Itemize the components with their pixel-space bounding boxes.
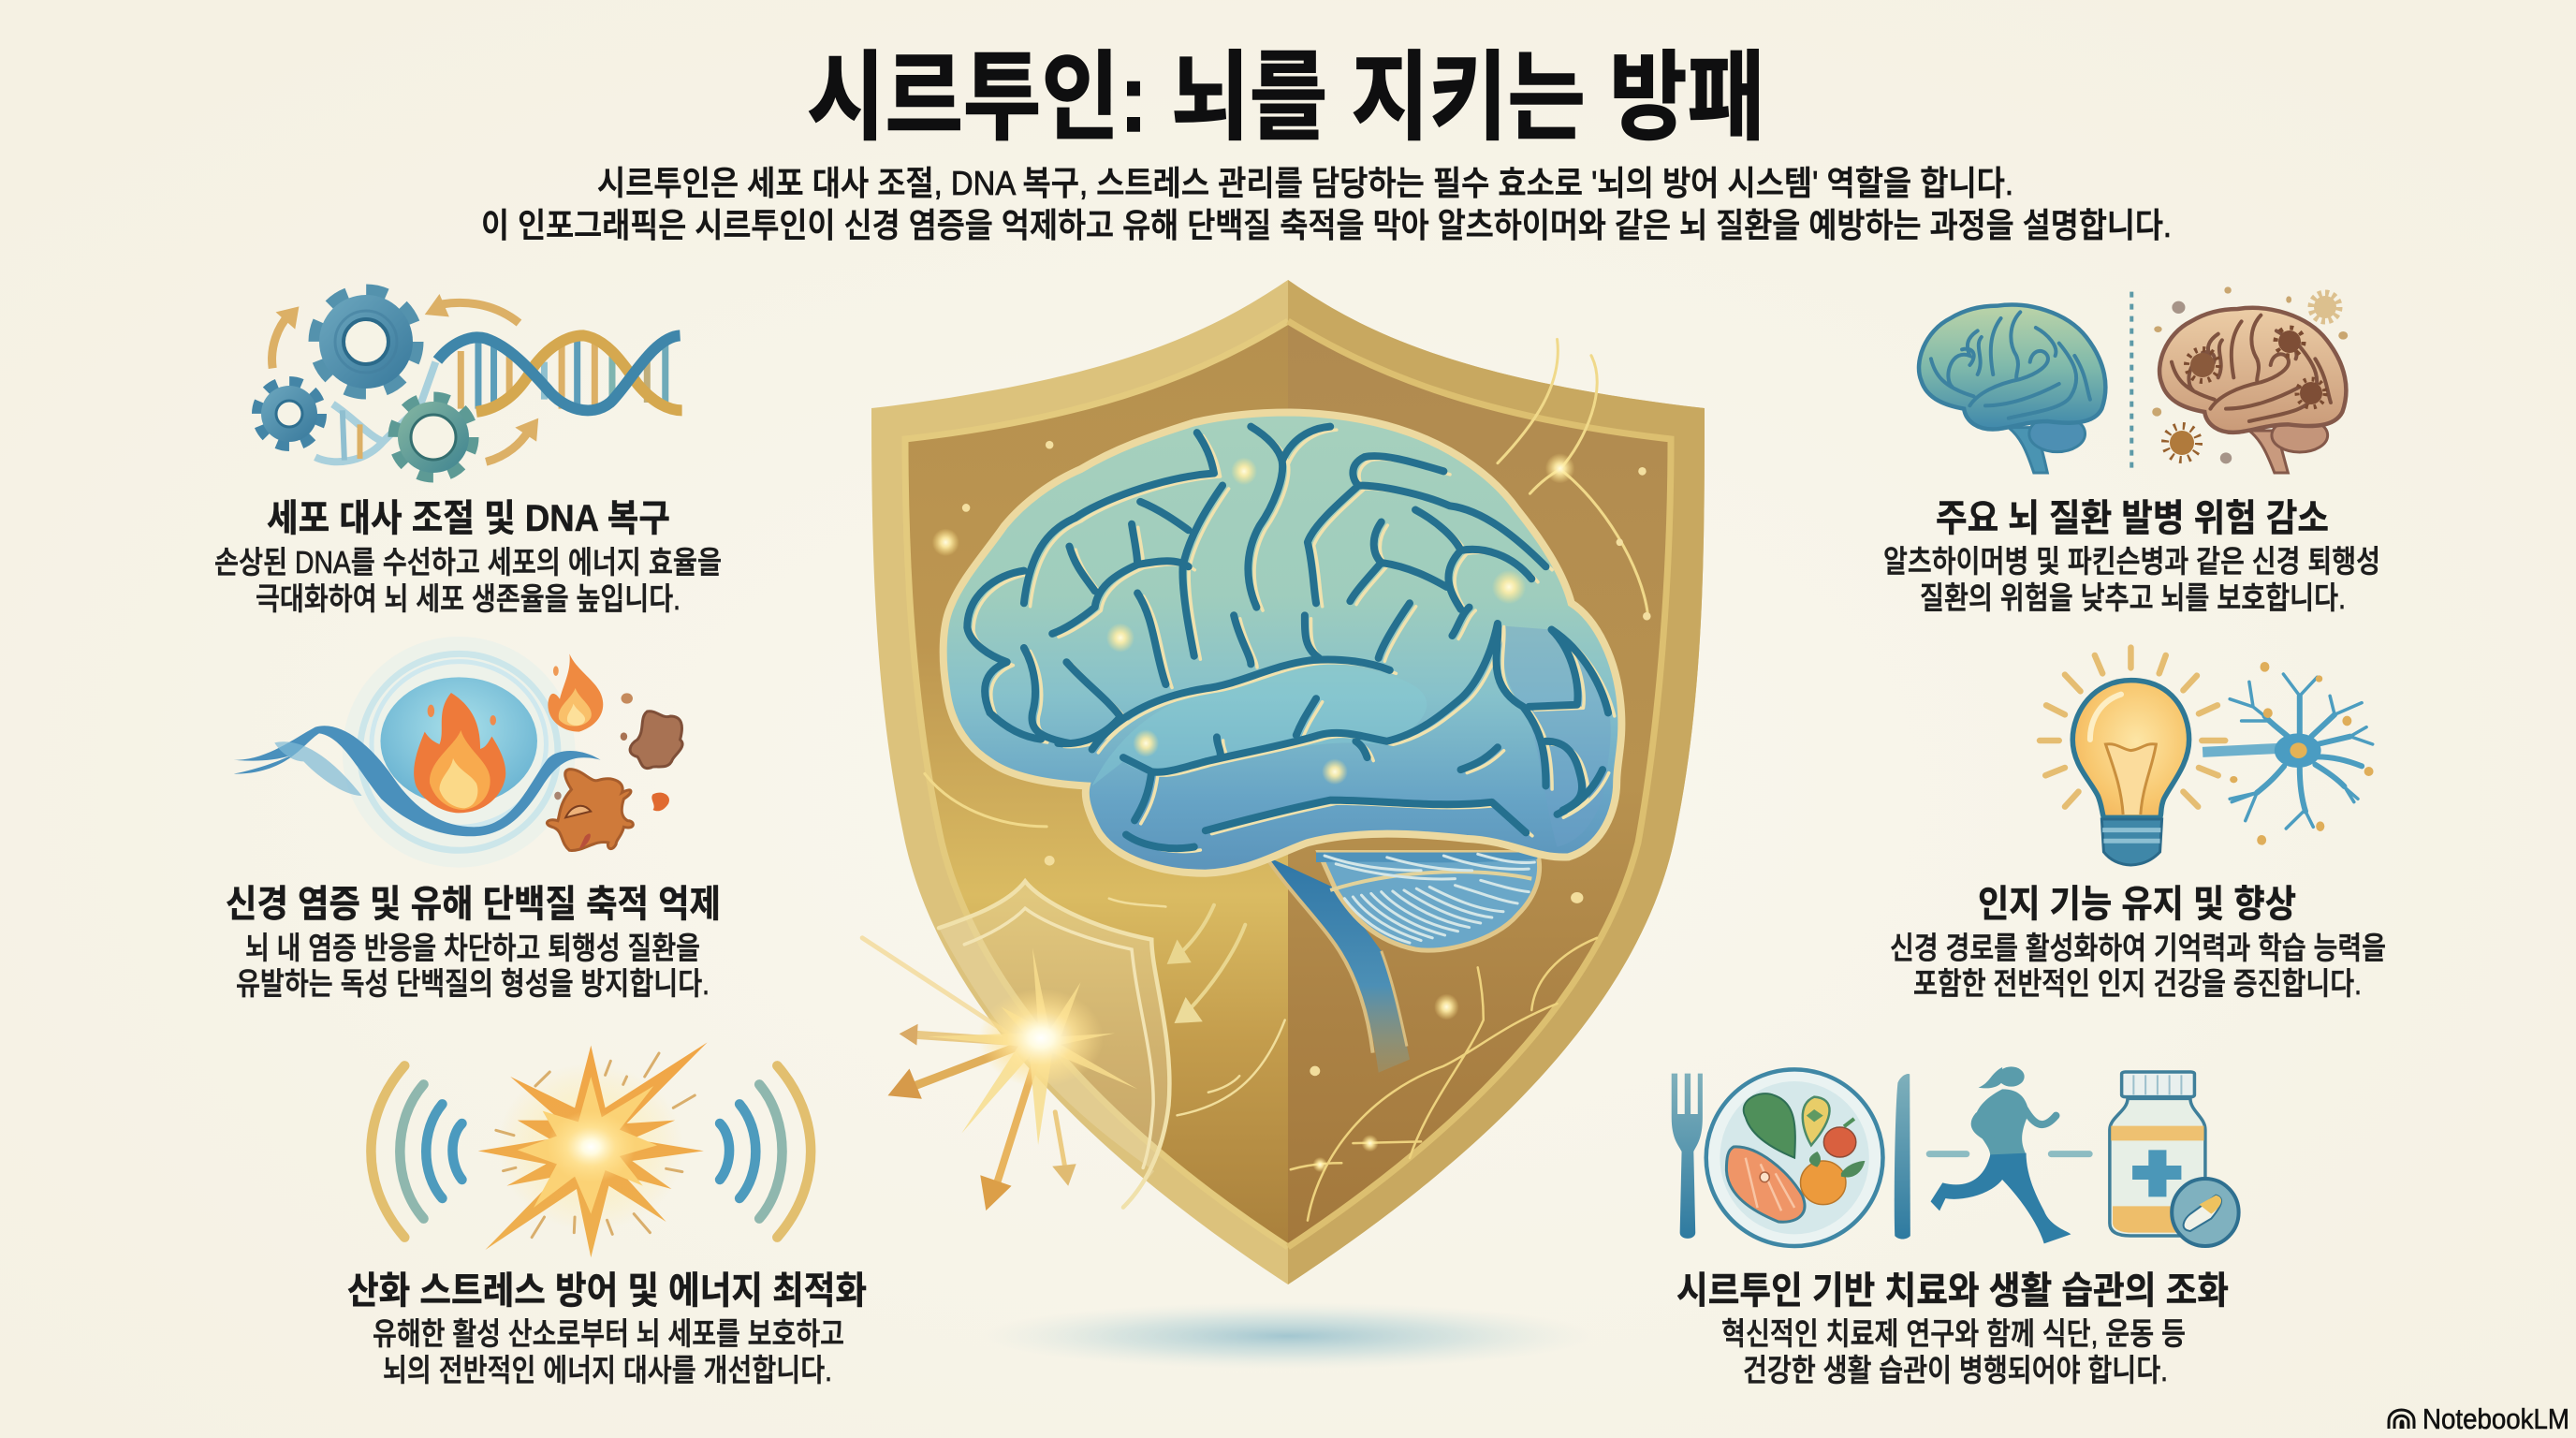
- heading: 주요 뇌 질환 발병 위험 감소: [1936, 498, 2329, 539]
- panel: cell metabolism and DNA repair: [214, 291, 722, 616]
- description: 뇌 내 염증 반응을 차단하고 퇴행성 질환을: [245, 931, 700, 965]
- central shield with brain: [862, 280, 1705, 1284]
- description: [1890, 931, 2386, 1001]
- description: 건강한 생활 습관이 병행되어야 합니다.: [1743, 1353, 2168, 1387]
- panel: reduced brain disease risk: [1883, 286, 2380, 615]
- panel: neuroinflammation and toxic protein suppression: [226, 637, 721, 1001]
- icon: starburst with signal arcs: [371, 1042, 811, 1257]
- heading: 인지 기능 유지 및 향상: [1978, 884, 2296, 925]
- description: 손상된 DNA를 수선하고 세포의 에너지 효율을: [214, 545, 722, 580]
- panel: therapy and lifestyle: [1672, 1066, 2239, 1387]
- description: 유해한 활성 산소로부터 뇌 세포를 보호하고: [373, 1316, 844, 1351]
- intro text: 이 인포그래픽은 시르투인이 신경 염증을 억제하고 유해 단백질 축적을 막아 알츠하이머와 같은 뇌 질환을 예방하는 과정을 설명합니다.: [481, 206, 2172, 244]
- description: 포함한 전반적인 인지 건강을 증진합니다.: [1913, 966, 2362, 1001]
- description: [236, 931, 710, 1001]
- small shield, arrows and impact burst: [862, 856, 1597, 1221]
- heading: 세포 대사 조절 및 DNA 복구: [267, 498, 670, 539]
- description: 혁신적인 치료제 연구와 함께 식단, 운동 등: [1721, 1316, 2186, 1351]
- intro text: [481, 164, 2172, 244]
- description: [1883, 544, 2380, 615]
- description: 신경 경로를 활성화하여 기억력과 학습 능력을: [1890, 931, 2386, 965]
- icon: healthy brain versus diseased brain: [1919, 286, 2348, 475]
- icon: plate, runner and medicine bottle: [1672, 1066, 2239, 1246]
- heading: 신경 염증 및 유해 단백질 축적 억제: [226, 884, 721, 925]
- panel: cognitive function: [1890, 648, 2386, 1001]
- panel: oxidative stress defence and energy optimisation: [347, 1042, 867, 1387]
- heading: 산화 스트레스 방어 및 에너지 최적화: [347, 1270, 867, 1312]
- intro text: 시르투인은 세포 대사 조절, DNA 복구, 스트레스 관리를 담당하는 필수 효소로 '뇌의 방어 시스템' 역할을 합니다.: [597, 164, 2013, 202]
- description: 극대화하여 뇌 세포 생존율을 높입니다.: [256, 581, 681, 616]
- description: 알츠하이머병 및 파킨슨병과 같은 신경 퇴행성: [1883, 544, 2380, 579]
- description: [214, 545, 722, 616]
- description: 질환의 위험을 낮추고 뇌를 보호합니다.: [1920, 580, 2346, 615]
- description: [1721, 1316, 2186, 1387]
- title: 시르투인: 뇌를 지키는 방패: [807, 44, 1765, 153]
- description: 뇌의 전반적인 에너지 대사를 개선합니다.: [383, 1353, 832, 1387]
- icon: flame in protective wave with protein clumps: [232, 637, 682, 868]
- ground shadow: [979, 1302, 1597, 1370]
- icon: gears, DNA and cycle arrows: [258, 291, 682, 476]
- shield body: [871, 280, 1705, 1284]
- gold swirls and sparkles, upper: [925, 339, 1651, 865]
- heading: 시르투인 기반 치료와 생활 습관의 조화: [1676, 1270, 2229, 1312]
- description: [373, 1316, 844, 1387]
- icon: light bulb and neuron: [2040, 648, 2374, 865]
- cerebellum and brain stem: [1265, 853, 1540, 1073]
- brain: [944, 412, 1621, 873]
- description: 유발하는 독성 단백질의 형성을 방지합니다.: [236, 966, 710, 1001]
